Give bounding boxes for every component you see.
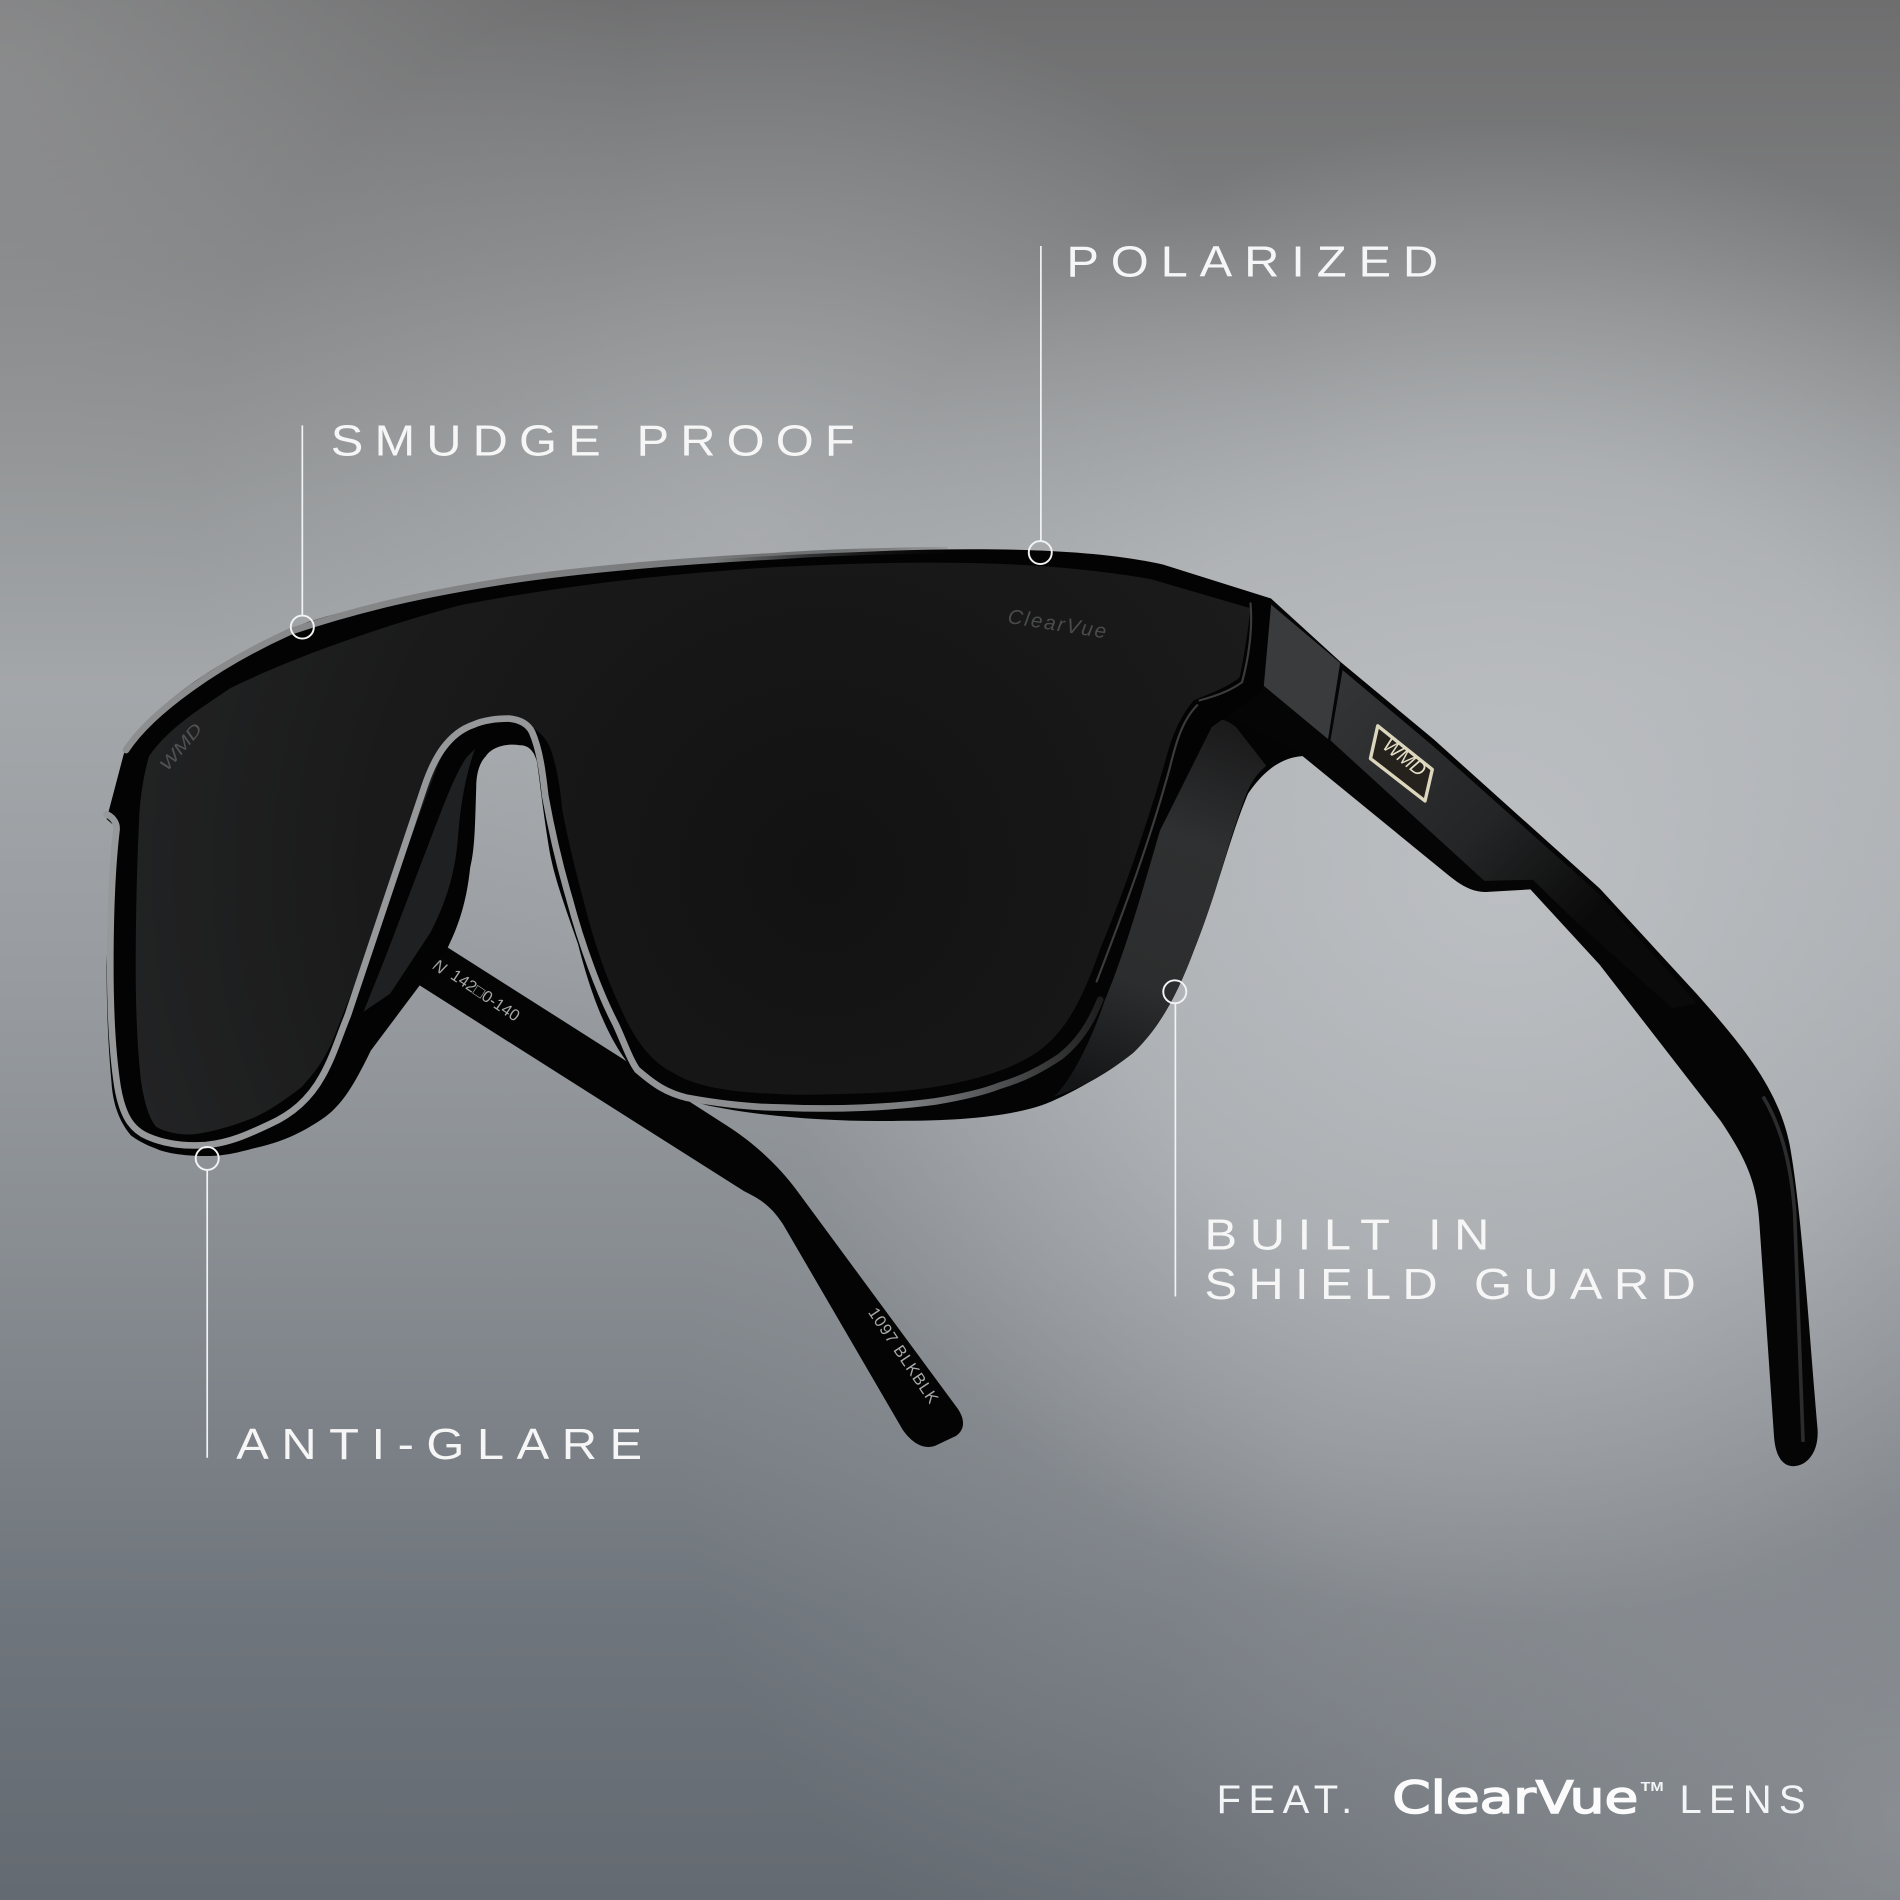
callout: smudge proof: SMUDGE PROOF [331,416,855,465]
polarized lens [136,563,1251,1134]
callout: anti-glare: ANTI-GLARE [236,1419,642,1468]
far temple arm: 142□0-140 [447,966,523,1025]
callout: polarized: POLARIZED [1066,237,1438,286]
temple logo badge [1370,726,1432,801]
far temple arm: N [429,956,450,979]
callout: polarized [1029,237,1438,564]
nose pad reflection [364,749,475,1012]
callout: built in shield guard [1163,980,1696,1308]
feature line: feat. ClearVue lens: FEAT. [1217,1778,1352,1822]
sunglasses product image [107,549,1818,1466]
far temple arm [419,946,963,1447]
callout: smudge proof [291,416,855,639]
feature line: feat. ClearVue lens: TM [1641,1779,1664,1794]
feature line: feat. ClearVue lens: LENS [1679,1778,1805,1822]
frame [107,549,1271,1156]
feature line: feat. ClearVue lens [1217,1771,1805,1824]
lens rim highlights [107,550,1251,1145]
temple logo badge: WMD [1378,733,1431,781]
callout: built in shield guard: BUILT IN [1204,1210,1489,1259]
polarized lens: WMD [156,720,206,774]
callout: anti-glare [196,1147,642,1468]
near temple arm [1212,599,1818,1466]
far temple arm: 1097 BLKBLK [864,1304,942,1407]
feature line: feat. ClearVue lens: ClearVue [1392,1771,1638,1824]
callout: built in shield guard: SHIELD GUARD [1204,1259,1696,1308]
polarized lens: ClearVue [1006,605,1108,643]
side shield guard [582,697,1303,1121]
